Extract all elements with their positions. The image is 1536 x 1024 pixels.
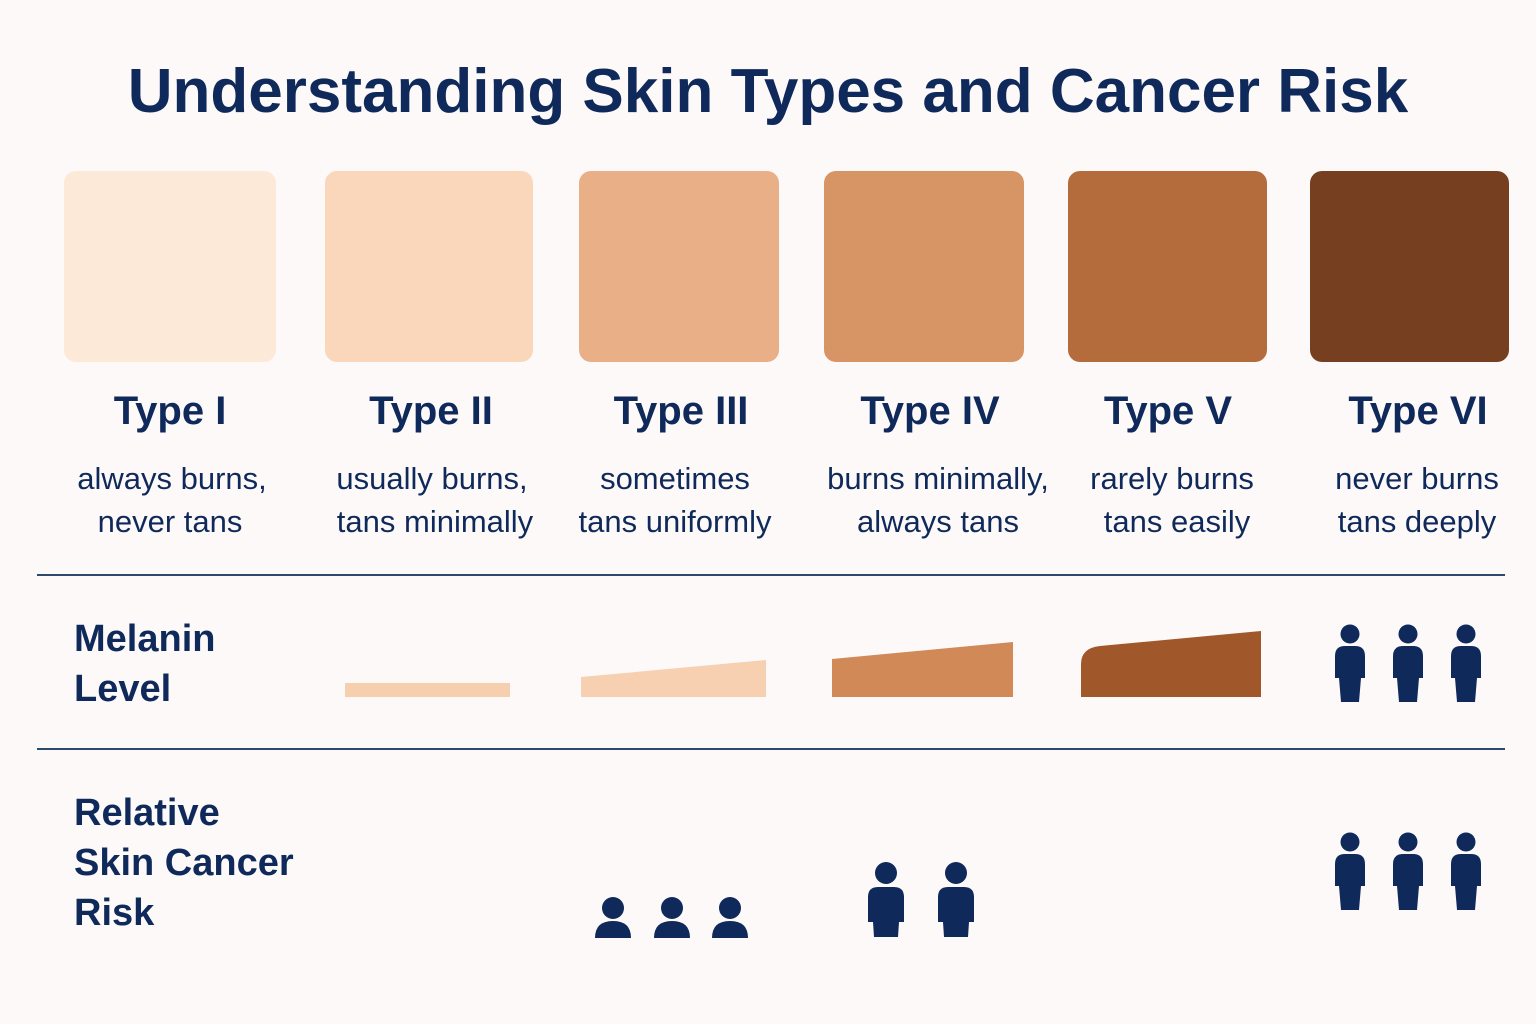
descriptions: tans easily (1104, 504, 1251, 539)
descriptions: never tans (98, 504, 242, 539)
melanin bars (345, 631, 1261, 697)
descriptions: tans minimally (337, 504, 534, 539)
descriptions: never burns (1335, 461, 1499, 496)
title: Understanding Skin Types and Cancer Risk (128, 57, 1409, 126)
descriptions: sometimes (600, 461, 750, 496)
icon: risk people (595, 832, 1481, 938)
descriptions (77, 461, 1499, 539)
descriptions: always burns, (77, 461, 267, 496)
type labels: Type VI (1348, 389, 1488, 433)
descriptions: tans uniformly (579, 504, 772, 539)
descriptions: usually burns, (336, 461, 528, 496)
swatch: Type II (325, 171, 533, 362)
descriptions: tans deeply (1338, 504, 1497, 539)
heading: Melanin Level: Level (74, 668, 171, 710)
swatch row (64, 171, 1509, 362)
swatch: Type IV (824, 171, 1024, 362)
type labels: Type V (1104, 389, 1232, 433)
type labels: Type II (369, 389, 493, 433)
heading: Relative Skin Cancer Risk: Risk (74, 892, 155, 934)
swatch: Type I (64, 171, 276, 362)
heading: Relative Skin Cancer Risk: Relative (74, 792, 220, 834)
type labels (114, 389, 1488, 433)
swatch: Type III (579, 171, 779, 362)
heading: Relative Skin Cancer Risk: Skin Cancer (74, 842, 294, 884)
type labels: Type III (614, 389, 748, 433)
type labels: Type I (114, 389, 226, 433)
type labels: Type IV (860, 389, 1000, 433)
descriptions: rarely burns (1090, 461, 1254, 496)
swatch: Type V (1068, 171, 1267, 362)
descriptions: burns minimally, (827, 461, 1049, 496)
swatch: Type VI (1310, 171, 1509, 362)
heading: Melanin Level: Melanin (74, 618, 215, 660)
descriptions: always tans (857, 504, 1019, 539)
icon: people melanin VI (1335, 624, 1481, 702)
